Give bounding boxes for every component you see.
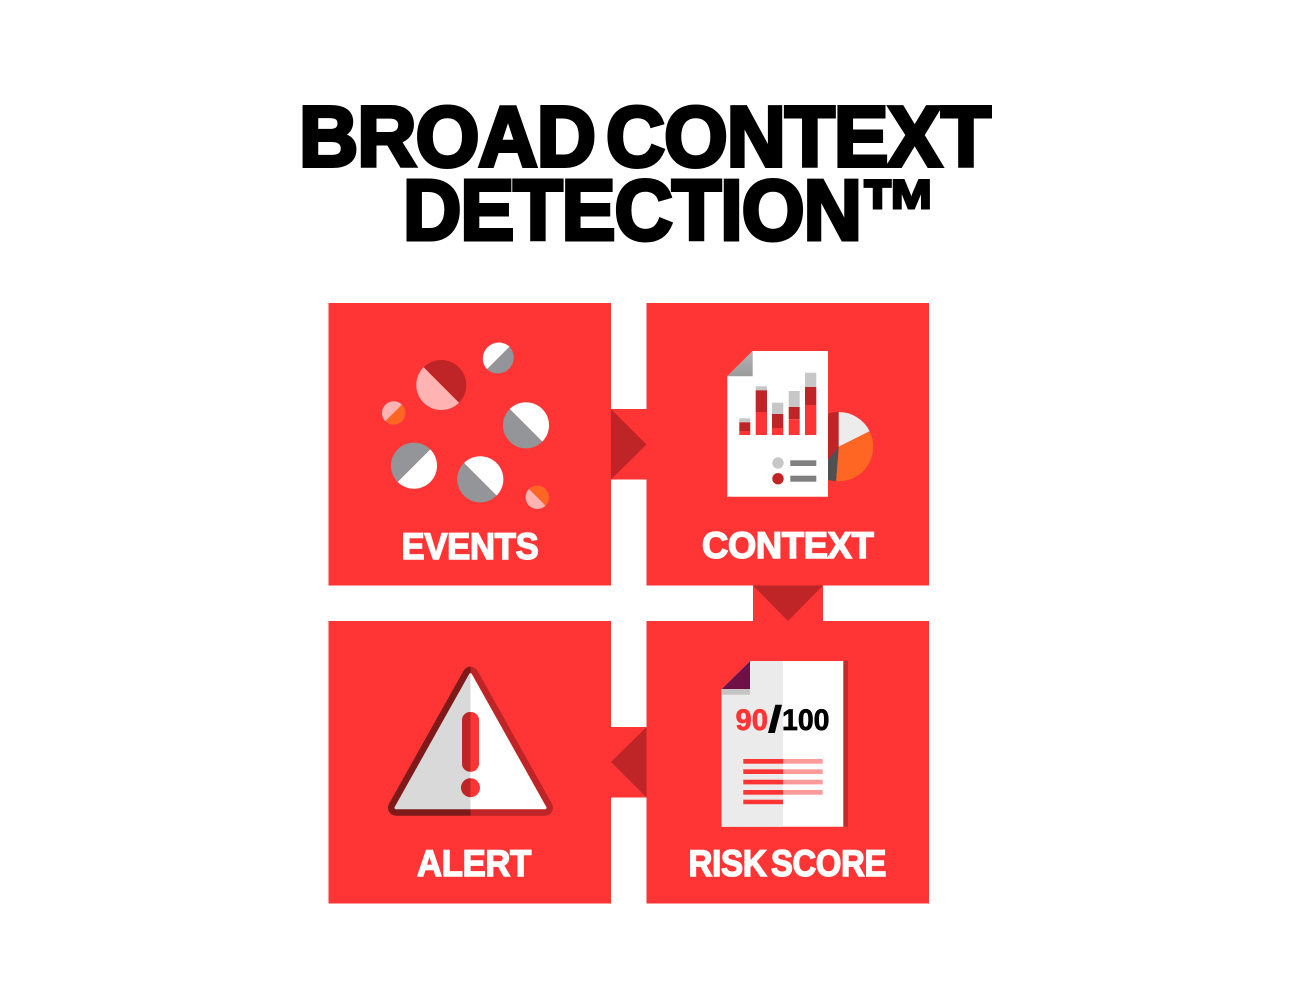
title: DETECTION bbox=[403, 164, 861, 258]
title bbox=[299, 90, 991, 260]
label: risk score bbox=[688, 843, 886, 884]
label: risk score: RISK bbox=[688, 843, 767, 884]
icon: pie chart bbox=[804, 412, 873, 481]
score value: 100 bbox=[782, 704, 830, 737]
label: alert: ALERT bbox=[417, 843, 532, 884]
icon: warning triangle bbox=[396, 675, 545, 808]
title: BROAD bbox=[299, 90, 595, 185]
icon: report document bbox=[727, 351, 828, 497]
title: CONTEXT bbox=[606, 90, 991, 185]
title: ™ bbox=[860, 161, 938, 260]
panel: context bbox=[646, 303, 929, 586]
label: events: EVENTS bbox=[402, 526, 538, 567]
text lines bbox=[743, 759, 823, 804]
score value: 90 bbox=[736, 704, 768, 737]
icon: score document bbox=[722, 661, 848, 827]
arrow: events to context bbox=[611, 409, 646, 480]
arrow: risk score to alert bbox=[611, 727, 646, 798]
panel: events bbox=[328, 303, 611, 586]
label: context: CONTEXT bbox=[702, 525, 874, 566]
bar chart bbox=[739, 373, 816, 435]
label: risk score: SCORE bbox=[771, 843, 886, 884]
score value: / bbox=[768, 699, 782, 740]
icon: event dots bbox=[382, 343, 549, 509]
panel: alert bbox=[328, 621, 611, 904]
panel: risk score bbox=[646, 621, 929, 904]
arrow: context to risk score bbox=[753, 586, 823, 621]
legend bbox=[772, 457, 816, 484]
score value bbox=[736, 699, 830, 740]
